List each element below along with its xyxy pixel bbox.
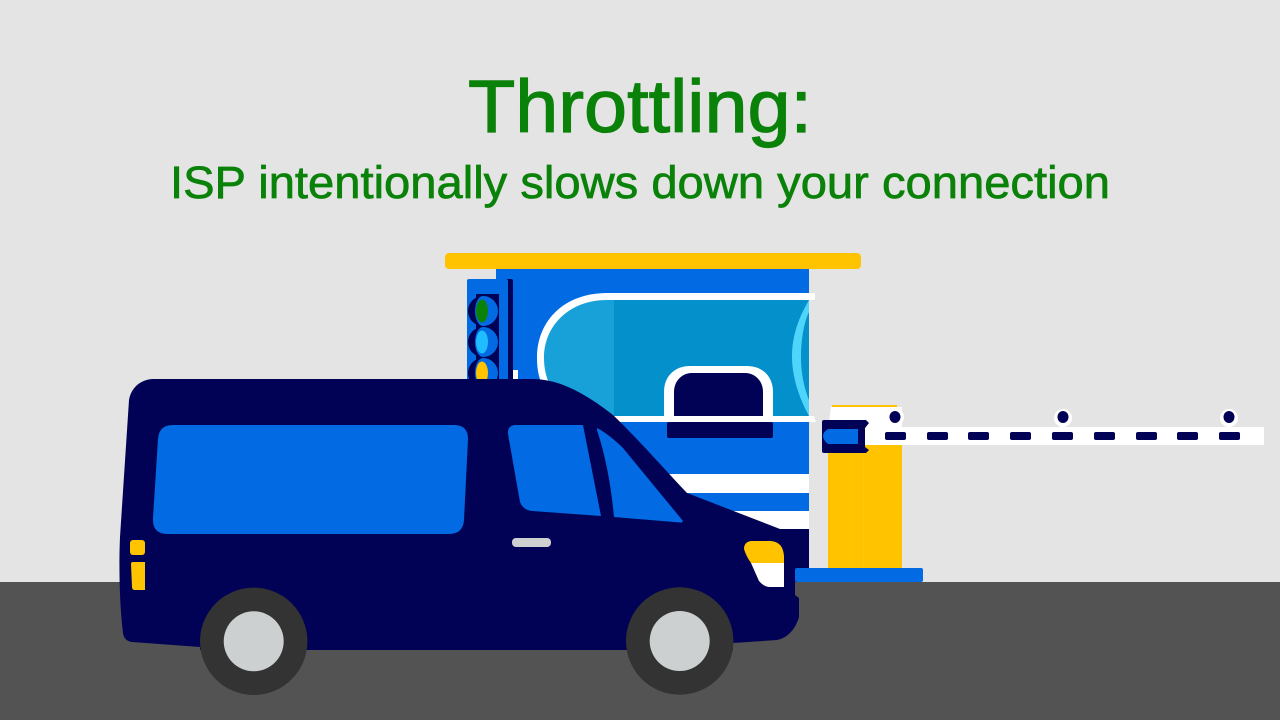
rear wheel — [200, 588, 307, 695]
traffic light — [467, 279, 518, 388]
ground — [0, 582, 1280, 720]
windshield — [597, 428, 683, 523]
barrier post — [828, 405, 902, 568]
barrier gate — [795, 405, 1264, 582]
van — [119, 379, 799, 695]
title: Throttling: — [468, 65, 812, 148]
barrier base — [795, 568, 923, 582]
barrier arm — [865, 408, 1264, 445]
side window — [153, 425, 468, 534]
booth window — [537, 293, 816, 438]
booth stripes — [640, 474, 809, 582]
door handle — [512, 538, 551, 547]
toll booth — [445, 253, 861, 582]
door window — [508, 425, 601, 516]
barrier hinge — [822, 420, 869, 453]
front wheel — [626, 587, 733, 695]
van body — [119, 379, 799, 650]
tail lights — [130, 540, 145, 590]
booth body — [496, 268, 809, 582]
booth roof — [445, 253, 861, 269]
subtitle: ISP intentionally slows down your connection — [170, 157, 1110, 208]
headlight — [744, 541, 784, 587]
